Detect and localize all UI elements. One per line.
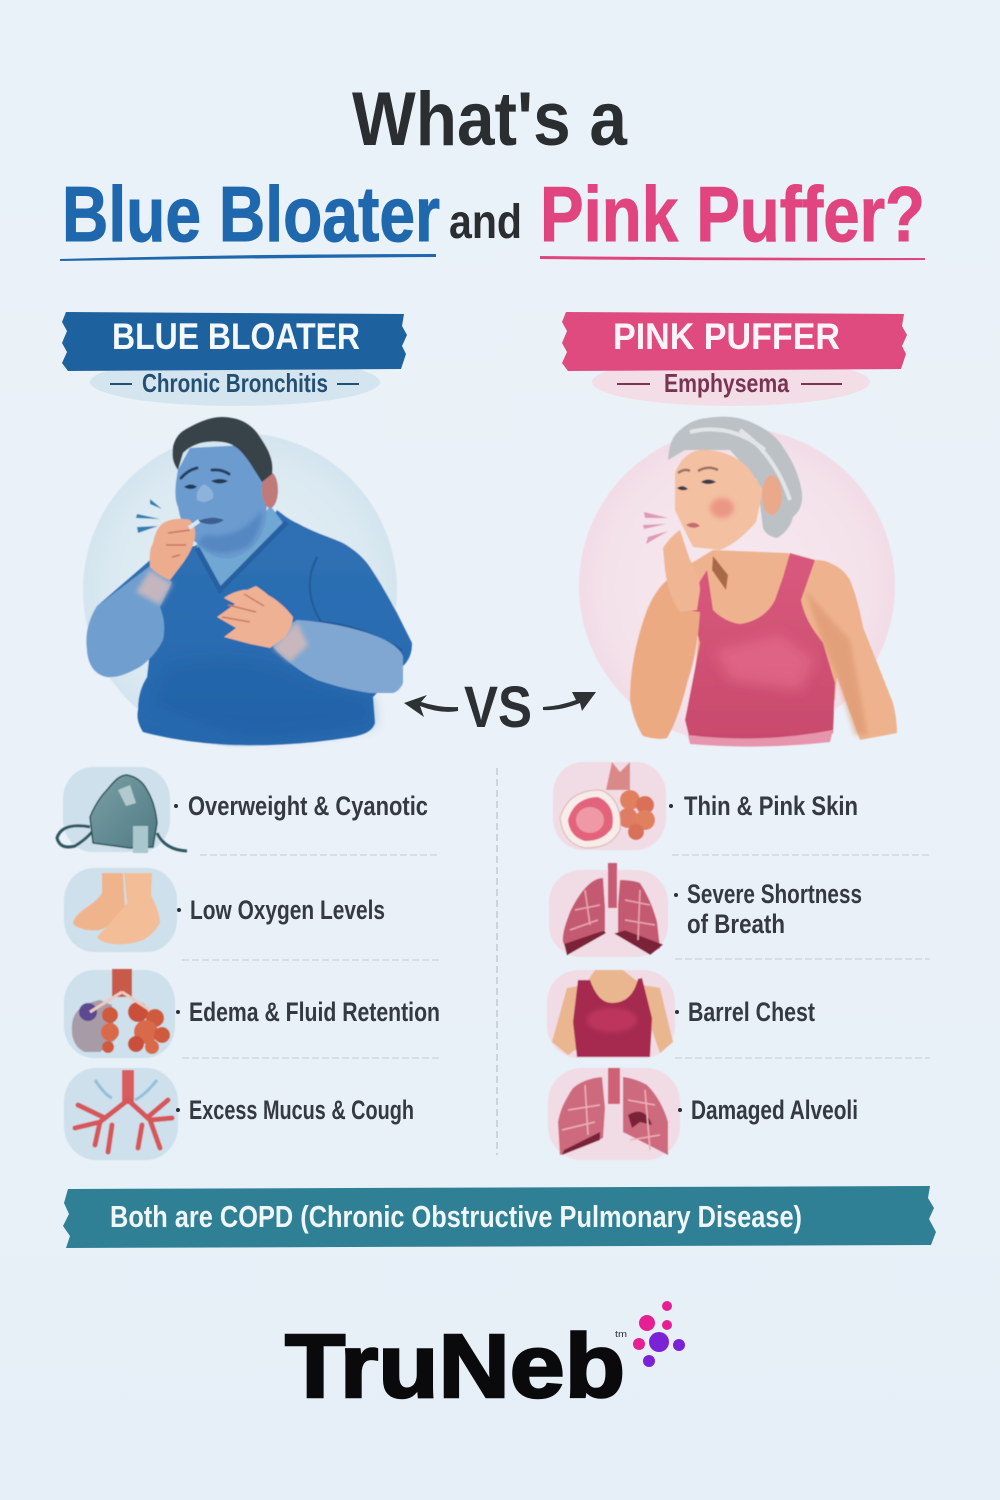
tank top — [685, 553, 835, 742]
shirt shading — [150, 658, 374, 738]
hand on chest — [217, 586, 293, 648]
title: Pink Puffer: Pink Puffer? — [540, 170, 925, 258]
banner: pink — [562, 312, 907, 371]
title line: What's a: What's a — [352, 77, 628, 162]
right wrist pale — [273, 622, 308, 662]
sleeve seam — [310, 557, 402, 650]
tank hem — [688, 730, 833, 747]
logo: TruNeb — [285, 1301, 685, 1417]
panel: blue bloater header — [62, 312, 407, 406]
underline: blue — [60, 254, 436, 261]
collar — [197, 522, 287, 590]
eyes — [677, 480, 716, 490]
vs marker — [404, 675, 596, 740]
icon: fluid filled lungs — [64, 969, 175, 1058]
text: low oxygen levels: Low Oxygen Levels — [190, 895, 385, 925]
text: thin and pink skin: Thin & Pink Skin — [684, 791, 858, 821]
upper body skin — [667, 550, 897, 740]
panel: blue bloater symptoms — [57, 767, 440, 1160]
logo dots — [633, 1301, 685, 1367]
title: and: and — [449, 196, 522, 249]
left arm pale wrist — [136, 570, 172, 605]
subtitle: Chronic Bronchitis: Chronic Bronchitis — [142, 368, 328, 398]
icon: lungs — [549, 863, 668, 957]
lips — [686, 523, 700, 528]
icon: oxygen mask — [57, 767, 187, 853]
banner label: PINK PUFFER: PINK PUFFER — [613, 316, 840, 357]
brows — [181, 468, 229, 478]
arrow: right — [543, 692, 596, 711]
face — [175, 445, 268, 559]
ear — [262, 472, 278, 508]
brows and eyes — [678, 468, 718, 473]
mouth — [198, 518, 224, 524]
neck shadow — [712, 556, 728, 590]
icon: bronchial tree — [64, 1068, 178, 1160]
breath marks — [643, 512, 668, 544]
illustration: pink puffer woman — [579, 417, 897, 747]
center dashed divider — [496, 768, 498, 1155]
ear — [762, 475, 782, 515]
hand — [663, 530, 700, 612]
fist fingers — [166, 530, 190, 557]
subtitle pill: pink — [592, 358, 870, 406]
face — [675, 450, 763, 550]
text: excess mucus and cough: Excess Mucus & Cough — [189, 1095, 414, 1125]
icon: barrel chest — [547, 970, 675, 1058]
cheek blush — [710, 498, 734, 518]
hair back — [668, 417, 802, 538]
right arm — [273, 620, 403, 693]
panel: pink puffer symptoms — [547, 762, 930, 1160]
jowl shading — [197, 510, 262, 553]
eyes — [184, 479, 228, 489]
text: VS: VS — [464, 675, 532, 740]
icon: alveoli — [553, 762, 666, 850]
text: severe shortness of breath — [674, 879, 862, 939]
raised arm — [630, 580, 700, 739]
hair — [173, 417, 273, 482]
trademark: tm — [615, 1329, 627, 1339]
arrow: left — [404, 695, 458, 717]
left arm — [86, 566, 172, 677]
text: severe shortness of breath: of Breath — [687, 909, 785, 939]
circle backdrop — [83, 433, 397, 747]
subtitle: Emphysema: Emphysema — [664, 368, 789, 398]
cough marks — [136, 499, 162, 533]
shirt body — [97, 510, 412, 745]
panel: pink puffer header — [562, 312, 907, 406]
icon: damaged lungs — [548, 1068, 680, 1160]
text: edema and fluid retention: Edema & Fluid Retention — [189, 997, 440, 1027]
finger lines — [222, 594, 264, 622]
fist — [150, 519, 195, 580]
subtitle pill: blue — [90, 358, 380, 406]
illustration: blue bloater man — [83, 417, 412, 747]
logo wordmark: TruNeb — [285, 1317, 625, 1417]
callout banner: COPD — [63, 1186, 936, 1248]
text: overweight and cyanotic: Overweight & Cyanotic — [188, 791, 428, 821]
text: severe shortness of breath: Severe Shortness — [687, 879, 862, 909]
text: barrel chest: Barrel Chest — [688, 997, 815, 1027]
banner: blue — [62, 312, 407, 371]
icon: swollen feet — [64, 868, 177, 952]
tank highlight — [715, 635, 815, 690]
banner label: BLUE BLOATER: BLUE BLOATER — [112, 316, 360, 357]
neck skin — [197, 505, 283, 590]
title — [60, 77, 925, 261]
inhaler — [189, 521, 199, 528]
callout text: Both are COPD (Chronic Obstructive Pulmonary Disease) — [110, 1199, 802, 1234]
arm shading — [805, 590, 868, 735]
title: Blue Bloater: Blue Bloater — [62, 170, 440, 258]
underline: pink — [540, 256, 925, 260]
hair highlights — [690, 429, 790, 500]
circle backdrop — [579, 428, 895, 744]
text: damaged alveoli: Damaged Alveoli — [691, 1095, 858, 1125]
nose — [197, 484, 213, 502]
